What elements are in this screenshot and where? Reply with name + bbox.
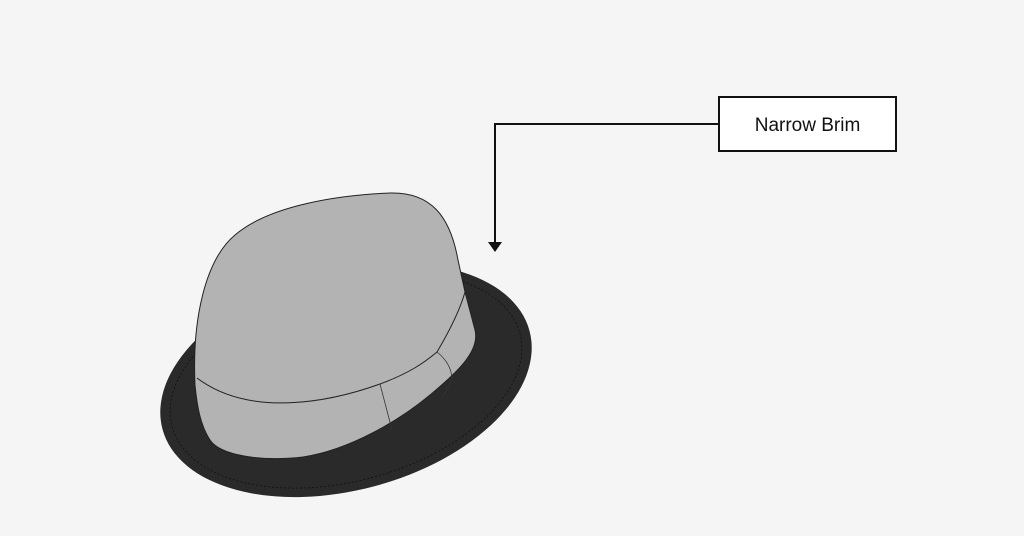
callout: Narrow Brim — [719, 97, 896, 151]
hat band — [197, 292, 465, 403]
callout: Narrow Brim: Narrow Brim — [755, 115, 860, 136]
hat brim — [134, 225, 558, 535]
arrow: callout pointer — [488, 124, 718, 252]
hat — [134, 193, 558, 535]
hat crown — [195, 193, 476, 459]
